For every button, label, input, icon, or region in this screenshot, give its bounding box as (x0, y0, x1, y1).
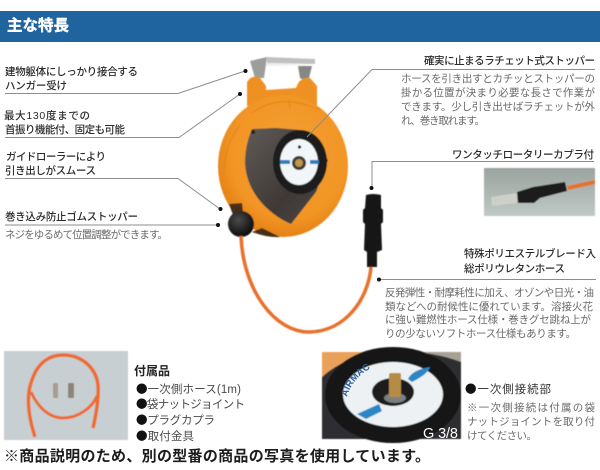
callout: guide roller: 引き出しがスムース (5, 164, 96, 177)
photo: primary connection: G 3/8 (423, 426, 458, 442)
photo: primary connection (321, 346, 462, 444)
dark panel (245, 128, 328, 224)
header band: 主な特長 (7, 16, 69, 34)
rubber stopper ball (228, 211, 254, 237)
callout: rotary coupler (370, 148, 594, 190)
callout: rubber stopper: ネジをゆるめて位置調整ができます。 (5, 228, 168, 241)
reel mount (247, 77, 317, 112)
primary connection note: ●一次側接続部 (465, 381, 552, 397)
hub (273, 130, 327, 194)
header band (0, 11, 600, 42)
accessories list: ●袋ナットジョイント (136, 396, 245, 412)
callout: ratchet stopper: 掛かる位置が決まり必要な長さで作業が (401, 86, 596, 99)
callout: polyurethane hose (377, 247, 596, 340)
callout: ratchet stopper: ホースを引き出すとカチッとストッパーの (401, 72, 595, 85)
callout: polyurethane hose: りの少ないソフトホース仕様もあります。 (385, 327, 576, 340)
callout: ratchet stopper: できます。少し引き出せばラチェットが外 (401, 100, 596, 113)
accessories list: ●一次側ホース(1m) (136, 381, 241, 397)
footnote: ※商品説明のため、別の型番の商品の写真を使用しています。 (4, 447, 430, 465)
accessories list: 付属品 (134, 363, 170, 378)
callout: guide roller (5, 151, 222, 211)
hose (241, 236, 371, 332)
callout: hanger: 建物躯体にしっかり接合する (5, 65, 138, 78)
callout: rubber stopper (5, 210, 220, 241)
photo: primary connection: AIRMAC (342, 364, 370, 397)
callout: hanger: ハンガー受け (5, 79, 67, 92)
primary connection note: ナットジョイントを取り付 (467, 415, 595, 428)
callout: polyurethane hose: 反発弾性・耐摩耗性に加え、オゾンや日光・油 (385, 286, 594, 299)
primary connection note: ※一次側接続は付属の袋 (467, 401, 596, 414)
primary connection note (465, 381, 596, 442)
callout: guide roller: ガイドローラーにより (6, 151, 106, 163)
rotary coupler (363, 194, 383, 267)
callout: rotary coupler: ワンタッチロータリーカプラ付 (452, 148, 594, 161)
illustration: hose reel (218, 57, 383, 332)
callout: rubber stopper: 巻き込み防止ゴムストッパー (5, 210, 138, 223)
callout: swivel: 首振り機能付、固定も可能 (5, 123, 126, 136)
accessories list: ●プラグカプラ (136, 412, 215, 428)
reel rim detail (224, 100, 320, 170)
reel body (218, 95, 348, 237)
photo: coupler (484, 168, 595, 216)
callout: hanger (5, 65, 248, 94)
callout: polyurethane hose: 特殊ポリエステルブレード入 (464, 247, 596, 260)
rear notch and shadow (229, 203, 280, 237)
callout: ratchet stopper: 確実に止まるラチェット式ストッパー (424, 54, 595, 67)
callout: polyurethane hose: 総ポリウレタンホース (464, 262, 565, 275)
callout: swivel (4, 92, 242, 138)
callout: polyurethane hose: 類などへの耐候性に優れています。溶接火花 (385, 300, 594, 313)
callout: ratchet stopper: れ、巻き取れます。 (401, 115, 485, 127)
accessories list (134, 363, 245, 444)
callout: ratchet stopper (307, 54, 596, 137)
primary connection note: けてください。 (467, 430, 537, 442)
panel screw (251, 130, 255, 134)
callout: polyurethane hose: に強い難燃性ホース仕様・巻きグセ跳ね上が (385, 313, 592, 326)
photo: accessories (4, 351, 128, 440)
accessories list: ●取付金具 (136, 428, 194, 444)
callout: swivel: 最大130度までの (4, 109, 90, 122)
hanger bracket (250, 57, 315, 82)
